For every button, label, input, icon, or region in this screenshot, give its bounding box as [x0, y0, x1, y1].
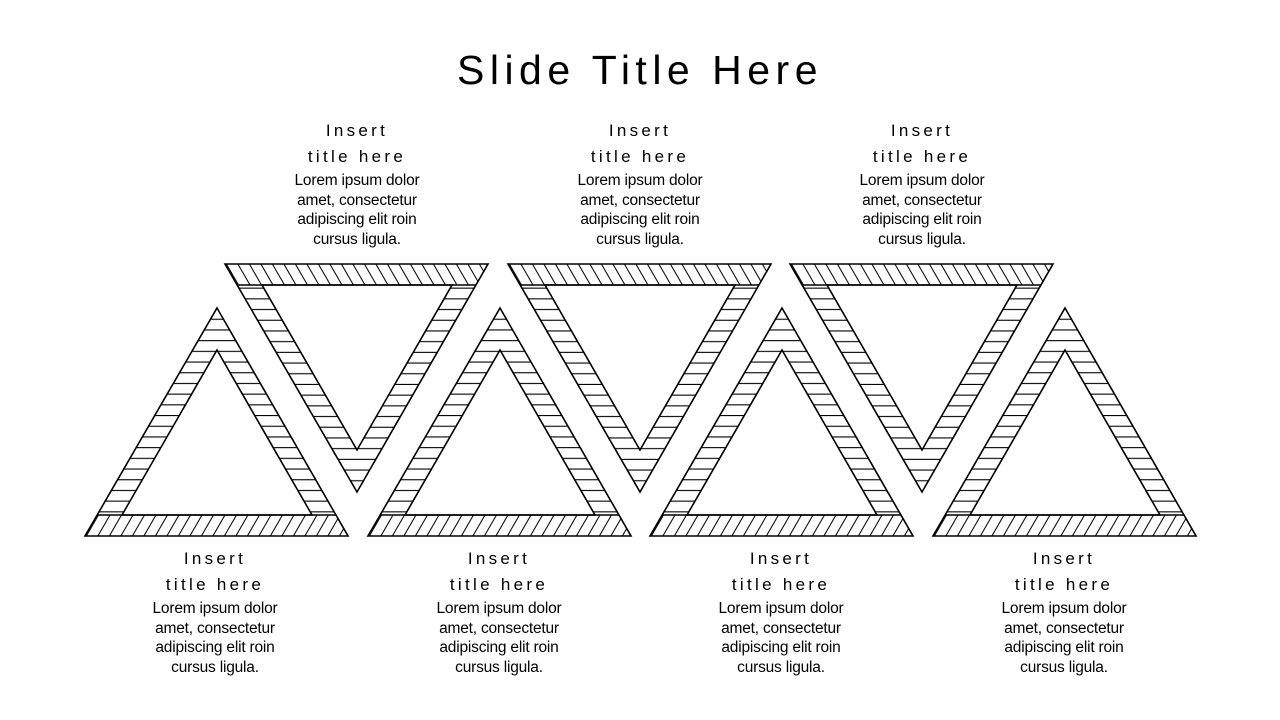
text: bottom 1: adipiscing elit roin [155, 639, 275, 656]
text: top 3: title here [873, 146, 971, 166]
text: bottom 3: Lorem ipsum dolor [719, 600, 843, 617]
text: bottom 4: cursus ligula. [1020, 658, 1108, 676]
text: bottom 2: Lorem ipsum dolor [437, 600, 561, 617]
text: top 1: cursus ligula. [313, 230, 401, 248]
text: top 1: title here [308, 146, 406, 166]
text: bottom 2 [437, 549, 562, 676]
text: top 1: adipiscing elit roin [297, 211, 417, 228]
up triangle 2 [368, 308, 631, 536]
text: bottom 3: Insert [750, 549, 812, 568]
title: Slide Title Here [457, 47, 823, 93]
up triangle 3 [650, 308, 913, 536]
up triangle 1 [85, 308, 348, 536]
text: top 1 [295, 121, 420, 248]
text: bottom 3: adipiscing elit roin [721, 639, 841, 656]
down triangle 2 [508, 264, 771, 492]
text: top 2: adipiscing elit roin [580, 211, 700, 228]
text: top 3: adipiscing elit roin [862, 211, 982, 228]
text: top 3: Insert [891, 121, 953, 140]
text: top 3: amet, consectetur [862, 192, 982, 208]
text: bottom 2: adipiscing elit roin [439, 639, 559, 656]
text: top 2: Insert [609, 121, 671, 140]
text: bottom 4: Insert [1033, 549, 1095, 568]
text: top 1: Lorem ipsum dolor [295, 172, 419, 189]
text: top 2: Lorem ipsum dolor [578, 172, 702, 189]
text: top 3 [860, 121, 984, 248]
text: top 2 [578, 121, 702, 248]
text: top 2: title here [591, 146, 689, 166]
text: bottom 4: Lorem ipsum dolor [1002, 600, 1126, 617]
text: bottom 4: amet, consectetur [1004, 620, 1124, 636]
down triangle 3 [790, 264, 1053, 492]
text: bottom 2: Insert [468, 549, 530, 568]
text: top 1: Insert [326, 121, 388, 140]
text: bottom 2: title here [450, 574, 548, 594]
text: top 1: amet, consectetur [297, 192, 417, 208]
text: bottom 3: amet, consectetur [721, 620, 841, 636]
text: bottom 2: amet, consectetur [439, 620, 559, 636]
up triangle 4 [933, 308, 1196, 536]
text: bottom 3 [719, 549, 844, 676]
text: bottom 1: cursus ligula. [171, 658, 259, 676]
text: top 2: amet, consectetur [580, 192, 700, 208]
text: bottom 3: cursus ligula. [737, 658, 825, 676]
text: bottom 3: title here [732, 574, 830, 594]
text: bottom 2: cursus ligula. [455, 658, 543, 676]
text: bottom 4: adipiscing elit roin [1004, 639, 1124, 656]
text: top 3: Lorem ipsum dolor [860, 172, 984, 189]
text: bottom 1: Lorem ipsum dolor [153, 600, 277, 617]
text: top 2: cursus ligula. [596, 230, 684, 248]
text: bottom 1: amet, consectetur [155, 620, 275, 636]
text: bottom 1: Insert [184, 549, 246, 568]
text: bottom 4: title here [1015, 574, 1113, 594]
text: bottom 1: title here [166, 574, 264, 594]
text: top 3: cursus ligula. [878, 230, 966, 248]
down triangle 1 [225, 264, 488, 492]
text: bottom 1 [153, 549, 278, 676]
text: bottom 4 [1002, 549, 1126, 676]
